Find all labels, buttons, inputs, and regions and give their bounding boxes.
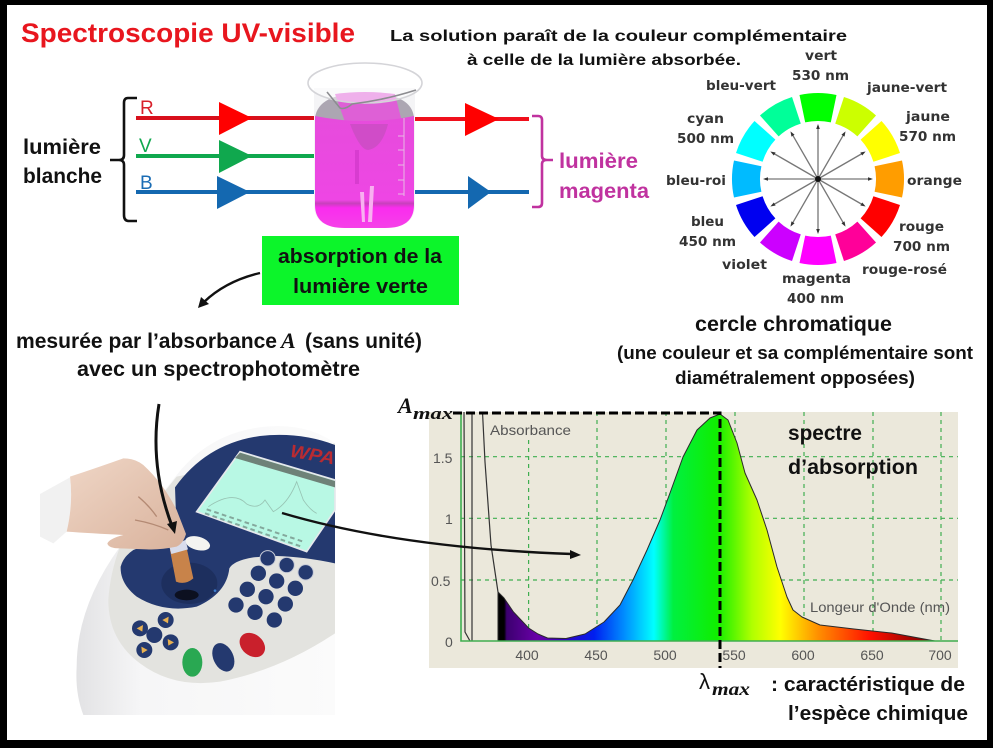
y tick labels: 1 [445, 511, 453, 527]
hand [67, 458, 186, 549]
blue ray with arrows [136, 173, 529, 209]
label: A max [396, 393, 454, 423]
green ray with arrow: V [139, 136, 152, 157]
absorbance trace [464, 412, 498, 641]
sample well [161, 563, 217, 604]
chart heading: absorption spectrum: d’absorption [788, 456, 918, 479]
axis title: absorbance: Absorbance [490, 422, 571, 438]
colour wheel: rouge-rosé [862, 263, 947, 278]
colour wheel: orange [907, 174, 962, 189]
colour wheel [666, 49, 962, 307]
title: Spectroscopie UV-visible [21, 18, 355, 48]
colour wheel: 570 nm [899, 130, 956, 145]
label: A max: A [396, 393, 413, 418]
y tick labels: 1.5 [433, 450, 453, 466]
x tick labels [515, 647, 952, 663]
screen [197, 452, 335, 552]
cuvette [169, 540, 193, 583]
colour wheel: bleu [691, 215, 724, 230]
caption: colour wheel: cercle chromatique [695, 313, 892, 336]
arrow: screen to spectrum [282, 513, 581, 559]
colour wheel: violet [722, 258, 767, 273]
action buttons [182, 648, 202, 677]
text block: absorbance measurement: mesurée par l’absorbance [16, 330, 277, 353]
colour wheel: 530 nm [792, 69, 849, 84]
text block: characteristic of species: l’espèce chimique [788, 703, 968, 725]
chart heading: absorption spectrum [788, 422, 918, 479]
magenta bracket [532, 116, 553, 207]
caption: colour wheel: diamétralement opposées) [675, 368, 915, 388]
x tick labels: 650 [860, 647, 884, 663]
text block: characteristic of species: : caractéristique de [771, 674, 965, 696]
red ray with arrows: R [140, 98, 154, 119]
colour wheel: rouge [899, 220, 944, 235]
spectrum area [498, 414, 935, 641]
colour wheel: 500 nm [677, 132, 734, 147]
label: A max: max [413, 404, 454, 423]
text block: absorbance measurement: (sans unité) [305, 330, 422, 353]
text block: complementary colour [390, 28, 847, 69]
label: magenta light: magenta [559, 180, 649, 203]
y tick labels [431, 450, 453, 650]
axes [461, 412, 958, 641]
keypad [228, 566, 303, 628]
colour wheel: 700 nm [893, 240, 950, 255]
absorption spectrum chart [429, 412, 958, 668]
label: lambda max: max [712, 679, 750, 699]
text block: absorbance measurement: avec un spectrophotomètre [77, 358, 360, 381]
label: lambda max: λ [699, 669, 710, 694]
x tick labels: 550 [722, 647, 746, 663]
spectrophotometer photo [40, 426, 336, 715]
dashed maximum guides [453, 413, 720, 668]
callout: green light absorption: absorption de la [278, 246, 443, 268]
colour wheel: jaune-vert [866, 81, 947, 96]
red ray with arrows [136, 98, 529, 136]
white light brace [110, 98, 137, 221]
colour wheel: 400 nm [787, 292, 844, 307]
x tick labels: 400 [515, 647, 539, 663]
text block: complementary colour: à celle de la lumière absorbée. [467, 52, 741, 69]
text block: characteristic of species [771, 674, 968, 725]
colour wheel: cyan [687, 112, 724, 127]
caption: colour wheel: (une couleur et sa complémentaire sont [617, 343, 973, 363]
callout: green light absorption: lumière verte [293, 276, 428, 298]
label: magenta light: lumière [559, 150, 638, 173]
text block: absorbance measurement [16, 328, 422, 381]
colour wheel: bleu-roi [666, 174, 726, 189]
beaker with magenta solution [308, 63, 422, 228]
colour wheel: magenta [782, 272, 851, 287]
colour wheel: 450 nm [679, 235, 736, 250]
x tick labels: 600 [791, 647, 815, 663]
label: magenta light [559, 150, 649, 203]
chart heading: absorption spectrum: spectre [788, 422, 862, 445]
control panel [108, 443, 335, 683]
x tick labels: 450 [584, 647, 608, 663]
arrow: spectrophotometer sample [156, 404, 177, 534]
colour wheel: vert [805, 49, 837, 64]
arrow: absorption to absorbance [198, 273, 260, 308]
callout: green light absorption [262, 236, 459, 305]
green ray with arrow [136, 136, 315, 173]
chart background [429, 412, 958, 668]
x tick labels: 700 [928, 647, 952, 663]
sleeve [40, 477, 71, 543]
instrument body [76, 426, 335, 715]
colour wheel: bleu-vert [706, 79, 776, 94]
label: white light [23, 136, 102, 188]
y tick labels: 0.5 [431, 573, 451, 589]
label: white light: lumière [23, 136, 101, 159]
text block: absorbance measurement: A [279, 328, 296, 353]
navy top panel [121, 435, 335, 609]
label: lambda max [699, 669, 750, 699]
colour wheel: jaune [905, 110, 950, 125]
instrument name pill [184, 534, 212, 553]
label: white light: blanche [23, 165, 102, 188]
grid [461, 412, 958, 640]
x tick labels: 500 [653, 647, 677, 663]
text block: complementary colour: La solution paraît de la couleur complémentaire [390, 28, 847, 45]
y tick labels: 0 [445, 634, 453, 650]
logo: WPA [289, 441, 336, 468]
navigation keys [132, 612, 179, 658]
blue ray with arrows: B [140, 173, 153, 194]
axis title: wavelength: Longeur d'Onde (nm) [810, 599, 950, 615]
caption: colour wheel [617, 313, 973, 388]
function keys [260, 551, 313, 580]
